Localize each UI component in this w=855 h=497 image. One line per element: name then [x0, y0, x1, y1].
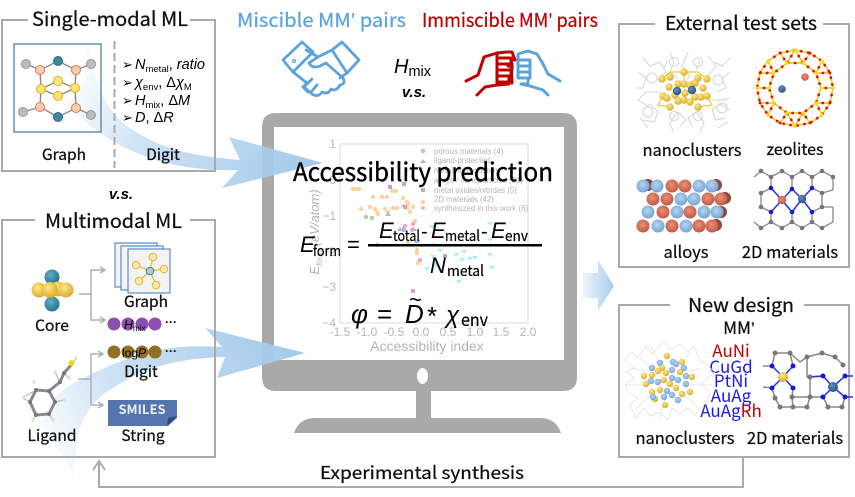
legend: metal nanoclusters	[434, 166, 500, 175]
heading: miscible pairs: Miscible MM ’ pairs	[237, 6, 406, 33]
label: graph: Graph	[124, 290, 168, 312]
formula: formation energy: metal	[447, 260, 484, 281]
v.s. left: v.s.	[109, 186, 133, 203]
arrow: single-modal to monitor	[62, 35, 323, 188]
points: triangles	[385, 159, 426, 243]
digit features: χ	[133, 75, 144, 91]
arrow: monitor to panels	[583, 260, 614, 311]
legend: alloys / nanoparticles (31)	[434, 176, 523, 185]
digit features: H	[135, 93, 146, 109]
digit features: env	[143, 82, 158, 93]
panel: single-modal ML	[2, 3, 215, 171]
label: experimental synthesis: Experimental synthesis	[320, 460, 524, 485]
title: accessibility prediction: Accessibility prediction	[293, 153, 553, 189]
y axis ticks: 0	[329, 173, 336, 187]
formula: phi: ~	[409, 287, 422, 312]
icon: handshake	[283, 42, 359, 96]
x axis ticks: -1.5	[330, 325, 351, 339]
digit row: Hmix: ···	[165, 315, 177, 329]
digit features: ratio	[177, 57, 205, 73]
icon: SMILES document: SMILES	[118, 399, 166, 418]
digit features: N	[135, 57, 146, 73]
formula: formation energy: env	[505, 225, 528, 246]
digit features	[122, 57, 205, 126]
label: string: String	[121, 424, 165, 446]
label: 2D materials: 2D materials	[747, 425, 843, 449]
points: porous materials	[364, 149, 425, 247]
legend	[434, 147, 528, 213]
candidate list: CuGd	[709, 353, 753, 378]
points: synthesized stars	[403, 206, 425, 262]
y axis ticks: 1	[329, 137, 336, 151]
arrows: ligand branches	[78, 351, 103, 408]
x axis ticks	[330, 325, 537, 339]
label: graph: Graph	[42, 143, 86, 165]
digit features: D, ΔR	[135, 110, 174, 126]
formula: phi: env	[461, 306, 488, 331]
x axis ticks: 1.0	[467, 325, 484, 339]
icon: core	[32, 270, 74, 312]
panel: new design	[619, 291, 853, 457]
icon: zeolite	[755, 48, 835, 128]
formula: formation energy: total	[393, 225, 420, 246]
digit features: χ	[174, 75, 185, 91]
label: nanoclusters: nanoclusters	[635, 425, 735, 449]
text: v.s. center: v.s.	[402, 84, 426, 101]
digit row: Hmix	[108, 315, 177, 333]
formula: formation energy: N	[430, 253, 446, 278]
digit row: logP: logP	[122, 346, 146, 360]
text: MM': MM’	[723, 314, 755, 339]
arrow: multimodal to monitor	[38, 328, 305, 477]
formula: phi	[351, 287, 488, 331]
digit features: ➢	[122, 75, 133, 90]
label: digit: Digit	[124, 360, 158, 382]
arrow: feedback loop	[93, 457, 743, 487]
formula: formation energy: -	[481, 221, 488, 243]
digit features: M	[184, 82, 192, 93]
heading: External test sets	[665, 9, 817, 36]
formula: formation energy: E	[300, 232, 315, 257]
digit features: mix	[145, 100, 161, 111]
points: cyan triangles	[424, 222, 495, 313]
formula: phi: =	[377, 299, 392, 329]
digit features: , Δ	[160, 93, 178, 109]
candidate list: AuNi	[712, 337, 750, 362]
legend: metal oxides/nitrides (5)	[434, 186, 517, 195]
digit features: , Δ	[158, 75, 176, 91]
icon: SMILES document	[108, 399, 177, 426]
digit features: M	[178, 93, 191, 109]
digit row: logP	[108, 344, 177, 360]
icon: ligand	[22, 356, 78, 422]
candidate list: AuAg	[711, 382, 752, 407]
icon: 2D material	[763, 350, 853, 410]
x axis ticks: 0.5	[440, 325, 457, 339]
label: core: Core	[35, 314, 69, 336]
x axis ticks: -0.5	[384, 325, 405, 339]
y axis ticks: −4	[322, 316, 336, 330]
x axis ticks: 0.0	[413, 325, 430, 339]
heading: immiscible pairs: Immiscible MM’ pairs	[422, 6, 598, 33]
axis titles: Accessibility index	[370, 338, 484, 354]
icon: 2D material	[754, 169, 835, 230]
formula: phi: D	[405, 299, 424, 329]
label: ligand: Ligand	[28, 424, 76, 446]
legend: synthesized in this work (6)	[434, 204, 528, 213]
candidate list: AuAgRh	[700, 397, 762, 422]
label: zeolites: zeolites	[766, 136, 824, 160]
candidate list	[700, 337, 762, 422]
formula: formation energy: =	[347, 232, 360, 257]
x axis ticks: 2.0	[520, 325, 537, 339]
scatter plot: (eV/atom)	[307, 189, 322, 250]
formula: phi: φ	[351, 299, 368, 329]
formula: formation energy: E	[431, 218, 446, 243]
panel: external test sets	[619, 9, 849, 267]
scatter plot: form	[315, 250, 324, 266]
y axis ticks: −2	[322, 245, 336, 259]
y axis ticks: −1	[322, 209, 336, 223]
scatter plot	[307, 137, 537, 354]
y axis ticks: −3	[322, 280, 336, 294]
arrows: core branches	[79, 267, 105, 323]
heading: New design	[688, 291, 794, 318]
label: alloys: alloys	[664, 239, 709, 263]
text: Hmix: H	[394, 56, 409, 78]
digit row: Hmix: mix	[133, 324, 145, 333]
digit features: ➢	[122, 57, 133, 72]
points: 2D materials	[351, 168, 425, 265]
digit row: logP: ···	[165, 344, 177, 358]
icon: graph	[14, 44, 101, 132]
points: oxides	[388, 182, 447, 293]
formula: formation energy: form	[313, 240, 341, 261]
heading: Multimodal ML	[45, 205, 182, 234]
digit features: ,	[169, 57, 177, 73]
icon: graph cards	[115, 243, 170, 293]
label: 2D materials: 2D materials	[742, 239, 838, 263]
label: digit: Digit	[146, 143, 180, 165]
digit features: ➢	[122, 93, 133, 108]
scatter plot: E	[307, 266, 322, 275]
formula: formation energy: E	[491, 218, 506, 243]
icon: nanocluster	[625, 342, 715, 420]
digit features: metal	[145, 64, 169, 75]
text: Hmix: mix	[408, 64, 432, 80]
formula: formation energy: metal	[445, 225, 480, 246]
legend: porous materials (4)	[434, 147, 504, 156]
formula: formation energy	[300, 218, 542, 281]
icon: fist bump	[466, 51, 560, 95]
x axis ticks: -1.0	[357, 325, 378, 339]
monitor	[262, 113, 577, 433]
icon: alloys	[636, 179, 731, 232]
candidate list: PtNi	[714, 367, 748, 392]
icon: nanocluster	[636, 52, 730, 132]
heading: Single-modal ML	[32, 3, 188, 32]
y axis ticks	[322, 137, 336, 330]
panel: multimodal ML	[2, 205, 215, 457]
formula: phi: χ	[444, 302, 460, 329]
legend: 2D materials (42)	[434, 195, 494, 204]
x axis ticks: 1.5	[493, 325, 510, 339]
digit features: ➢	[122, 110, 133, 125]
digit row: Hmix: H	[124, 318, 134, 332]
formula: formation energy: -	[421, 221, 428, 243]
formula: formation energy: E	[379, 218, 394, 243]
legend: ligand-protected	[434, 156, 490, 165]
formula: phi: *	[427, 301, 437, 331]
label: nanoclusters: nanoclusters	[642, 137, 742, 161]
